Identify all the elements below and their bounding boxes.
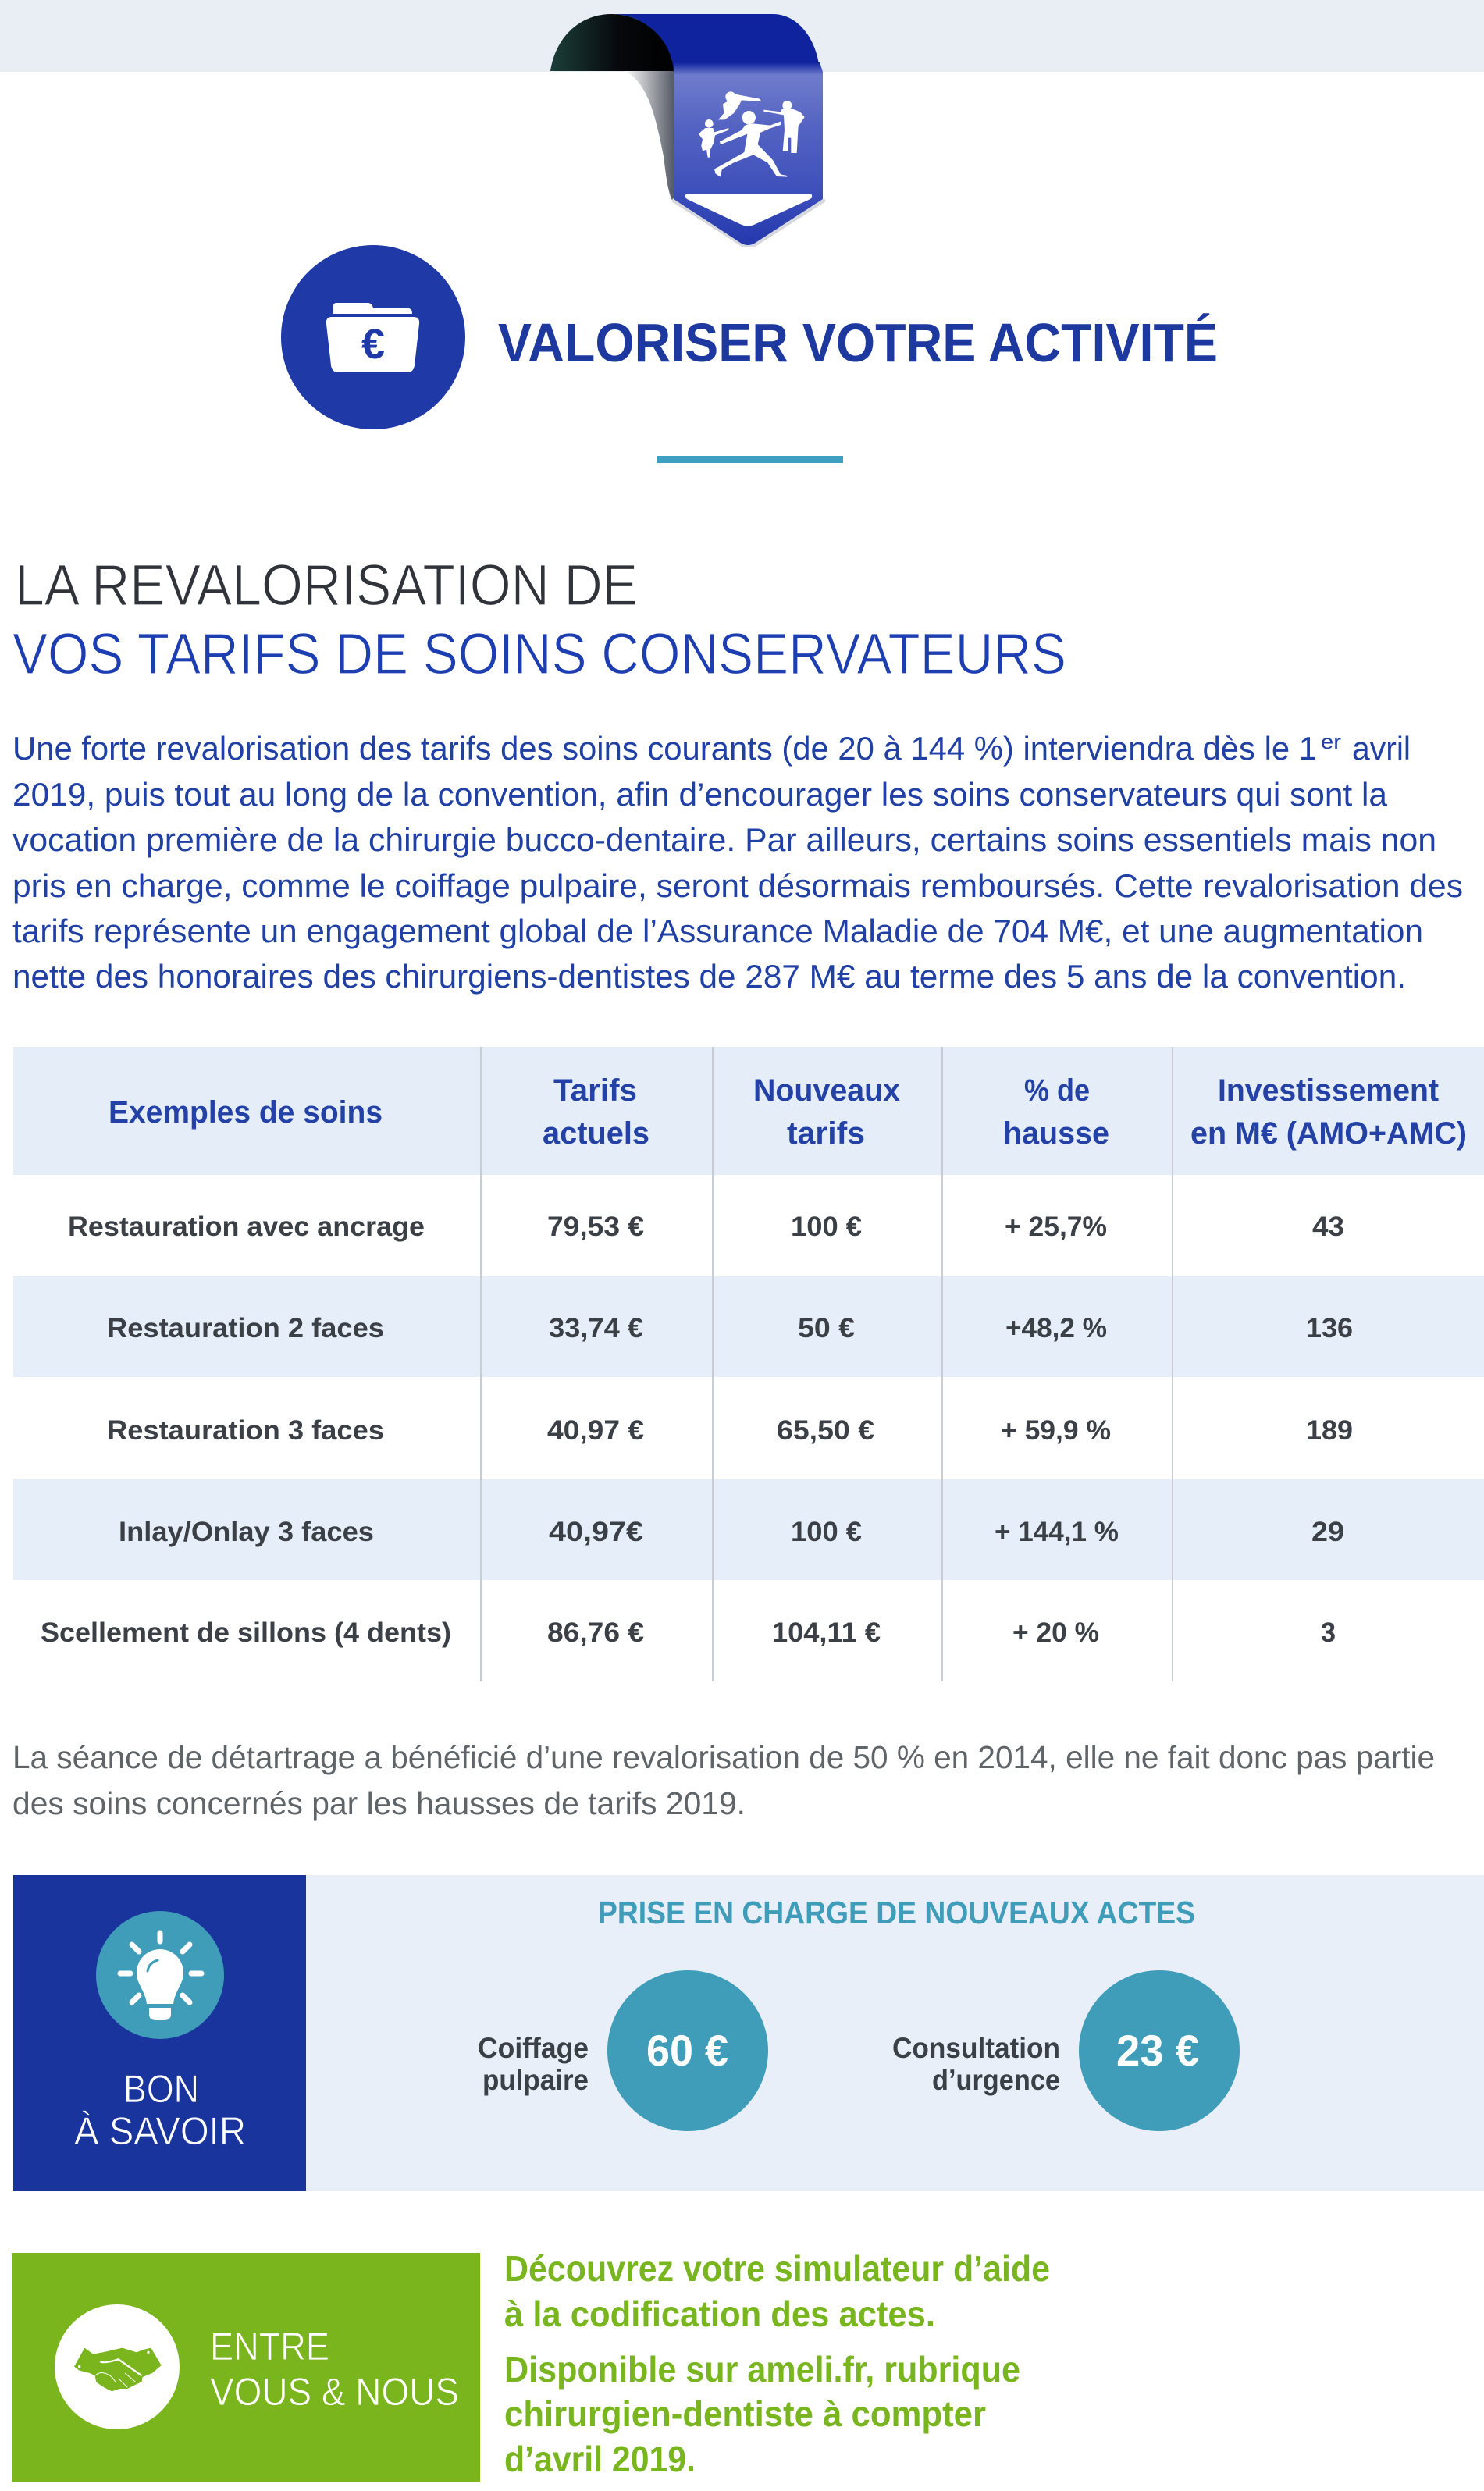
panel: entre vous et nous: ENTRE — [210, 2325, 329, 2368]
intro paragraph: tarifs représente un engagement global de l’Assurance Maladie de 704 M€, et une augmentation — [12, 913, 1423, 949]
table row: inlay/onlay 3 faces: 29 — [1311, 1517, 1344, 1547]
table row: restauration 2 faces: 33,74 € — [549, 1313, 643, 1343]
title: VALORISER VOTRE ACTIVITÉ — [498, 312, 1218, 373]
table row: inlay/onlay 3 faces — [119, 1517, 1344, 1547]
table row: scellement de sillons — [41, 1617, 1336, 1648]
header band — [0, 0, 1484, 72]
table row: restauration 3 faces: 65,50 € — [777, 1415, 874, 1446]
table row: inlay/onlay 3 faces: 100 € — [791, 1517, 862, 1547]
table row: scellement de sillons: 3 — [1321, 1617, 1336, 1648]
panel: entre vous et nous: VOUS & NOUS — [210, 2370, 459, 2414]
icon: light bulb — [96, 1911, 224, 2039]
icon: round folder with euro — [281, 245, 465, 429]
callout: simulateur — [504, 2248, 1050, 2479]
table: tariffs — [13, 1047, 1484, 1681]
table row: restauration 2 faces: 50 € — [798, 1313, 855, 1343]
icon: family silhouettes — [699, 91, 805, 177]
table row: restauration 2 faces: +48,2 % — [1005, 1313, 1107, 1343]
icon: ribbon bookmark with family — [550, 14, 826, 247]
table row: restauration avec ancrage — [68, 1212, 1344, 1242]
callout: simulateur: Découvrez votre simulateur d’aide — [504, 2248, 1050, 2289]
intro paragraph — [12, 730, 1463, 995]
heading: VOS TARIFS DE SOINS CONSERVATEURS — [12, 621, 1066, 686]
callout: simulateur: Disponible sur ameli.fr, rubrique — [504, 2349, 1020, 2390]
coiffage pulpaire: Coiffage — [478, 2032, 589, 2064]
intro paragraph: Une forte revalorisation des tarifs des soins courants (de 20 à 144 %) interviendra dès le 1 — [12, 730, 1317, 767]
note paragraph — [12, 1739, 1435, 1821]
table header: Nouveaux — [753, 1073, 900, 1108]
note paragraph: des soins concernés par les hausses de tarifs 2019. — [12, 1785, 746, 1821]
intro paragraph: 2019, puis tout au long de la convention, afin d’encourager les soins conservateurs qui sont la — [12, 776, 1388, 813]
coiffage pulpaire: pulpaire — [482, 2064, 589, 2096]
callout: simulateur: à la codification des actes. — [504, 2293, 935, 2334]
consultation d'urgence: Consultation — [892, 2032, 1060, 2064]
consultation d'urgence — [892, 1970, 1240, 2131]
table row: restauration 2 faces — [107, 1313, 1353, 1343]
note paragraph: La séance de détartrage a bénéficié d’une revalorisation de 50 % en 2014, elle ne fait donc pas partie — [12, 1739, 1435, 1775]
coiffage pulpaire — [478, 1970, 768, 2131]
panel: entre vous et nous — [12, 2253, 480, 2482]
table row: inlay/onlay 3 faces: Inlay/Onlay 3 faces — [119, 1517, 374, 1547]
heading — [12, 553, 1066, 686]
panel heading: PRISE EN CHARGE DE NOUVEAUX ACTES — [598, 1895, 1195, 1931]
table header: Investissement — [1218, 1073, 1439, 1108]
table row: inlay/onlay 3 faces: 40,97€ — [549, 1517, 643, 1547]
intro paragraph: er — [1321, 730, 1341, 753]
consultation d'urgence: d’urgence — [932, 2064, 1060, 2096]
accent bar — [657, 456, 843, 463]
table row: inlay/onlay 3 faces: + 144,1 % — [995, 1517, 1119, 1547]
callout: simulateur: chirurgien-dentiste à compter — [504, 2393, 986, 2434]
consultation d'urgence: 23 € — [1116, 2026, 1199, 2075]
table row: scellement de sillons: 86,76 € — [547, 1617, 644, 1648]
table row: restauration avec ancrage: 79,53 € — [547, 1212, 644, 1242]
intro paragraph: nette des honoraires des chirurgiens-dentistes de 287 M€ au terme des 5 ans de la convention. — [12, 958, 1406, 995]
table row: scellement de sillons: 104,11 € — [772, 1617, 881, 1648]
panel: bon à savoir — [13, 1875, 306, 2191]
table row: restauration 2 faces: 136 — [1306, 1313, 1353, 1343]
table row: restauration avec ancrage: + 25,7% — [1005, 1212, 1107, 1242]
table header: Tarifs — [553, 1073, 637, 1108]
table row: scellement de sillons: + 20 % — [1012, 1617, 1099, 1648]
panel: prise en charge — [306, 1875, 1484, 2191]
table row: restauration avec ancrage: 43 — [1312, 1212, 1344, 1242]
table row: restauration avec ancrage: 100 € — [791, 1212, 862, 1242]
table row: scellement de sillons: Scellement de sillons (4 dents) — [41, 1617, 451, 1648]
table row: restauration avec ancrage: Restauration avec ancrage — [68, 1212, 425, 1242]
heading: LA REVALORISATION DE — [15, 553, 638, 617]
table row: restauration 3 faces: Restauration 3 faces — [107, 1415, 384, 1446]
table header: tarifs — [787, 1116, 865, 1151]
intro paragraph: vocation première de la chirurgie bucco-dentaire. Par ailleurs, certains soins essentiels mais non — [12, 821, 1436, 858]
icon: handshake — [55, 2304, 180, 2429]
intro paragraph: avril — [1352, 730, 1411, 767]
table row: restauration 3 faces: 40,97 € — [547, 1415, 644, 1446]
table row: restauration 3 faces: 189 — [1306, 1415, 1353, 1446]
table header: % de — [1024, 1073, 1090, 1108]
icon: round folder with euro: € — [361, 321, 385, 368]
intro paragraph: pris en charge, comme le coiffage pulpaire, seront désormais remboursés. Cette revalorisation des — [12, 867, 1463, 904]
table header: hausse — [1003, 1116, 1109, 1151]
table row: restauration 2 faces: Restauration 2 faces — [107, 1313, 384, 1343]
coiffage pulpaire: 60 € — [646, 2026, 728, 2075]
callout: simulateur: d’avril 2019. — [504, 2439, 696, 2479]
panel: bon à savoir: À SAVOIR — [74, 2109, 246, 2153]
table row: restauration 3 faces — [107, 1415, 1353, 1446]
table header — [109, 1073, 1467, 1151]
table header: actuels — [543, 1116, 649, 1151]
table row: restauration 3 faces: + 59,9 % — [1001, 1415, 1111, 1446]
panel: bon à savoir: BON — [123, 2067, 199, 2111]
table header: en M€ (AMO+AMC) — [1190, 1116, 1467, 1151]
table header: Exemples de soins — [109, 1095, 383, 1130]
